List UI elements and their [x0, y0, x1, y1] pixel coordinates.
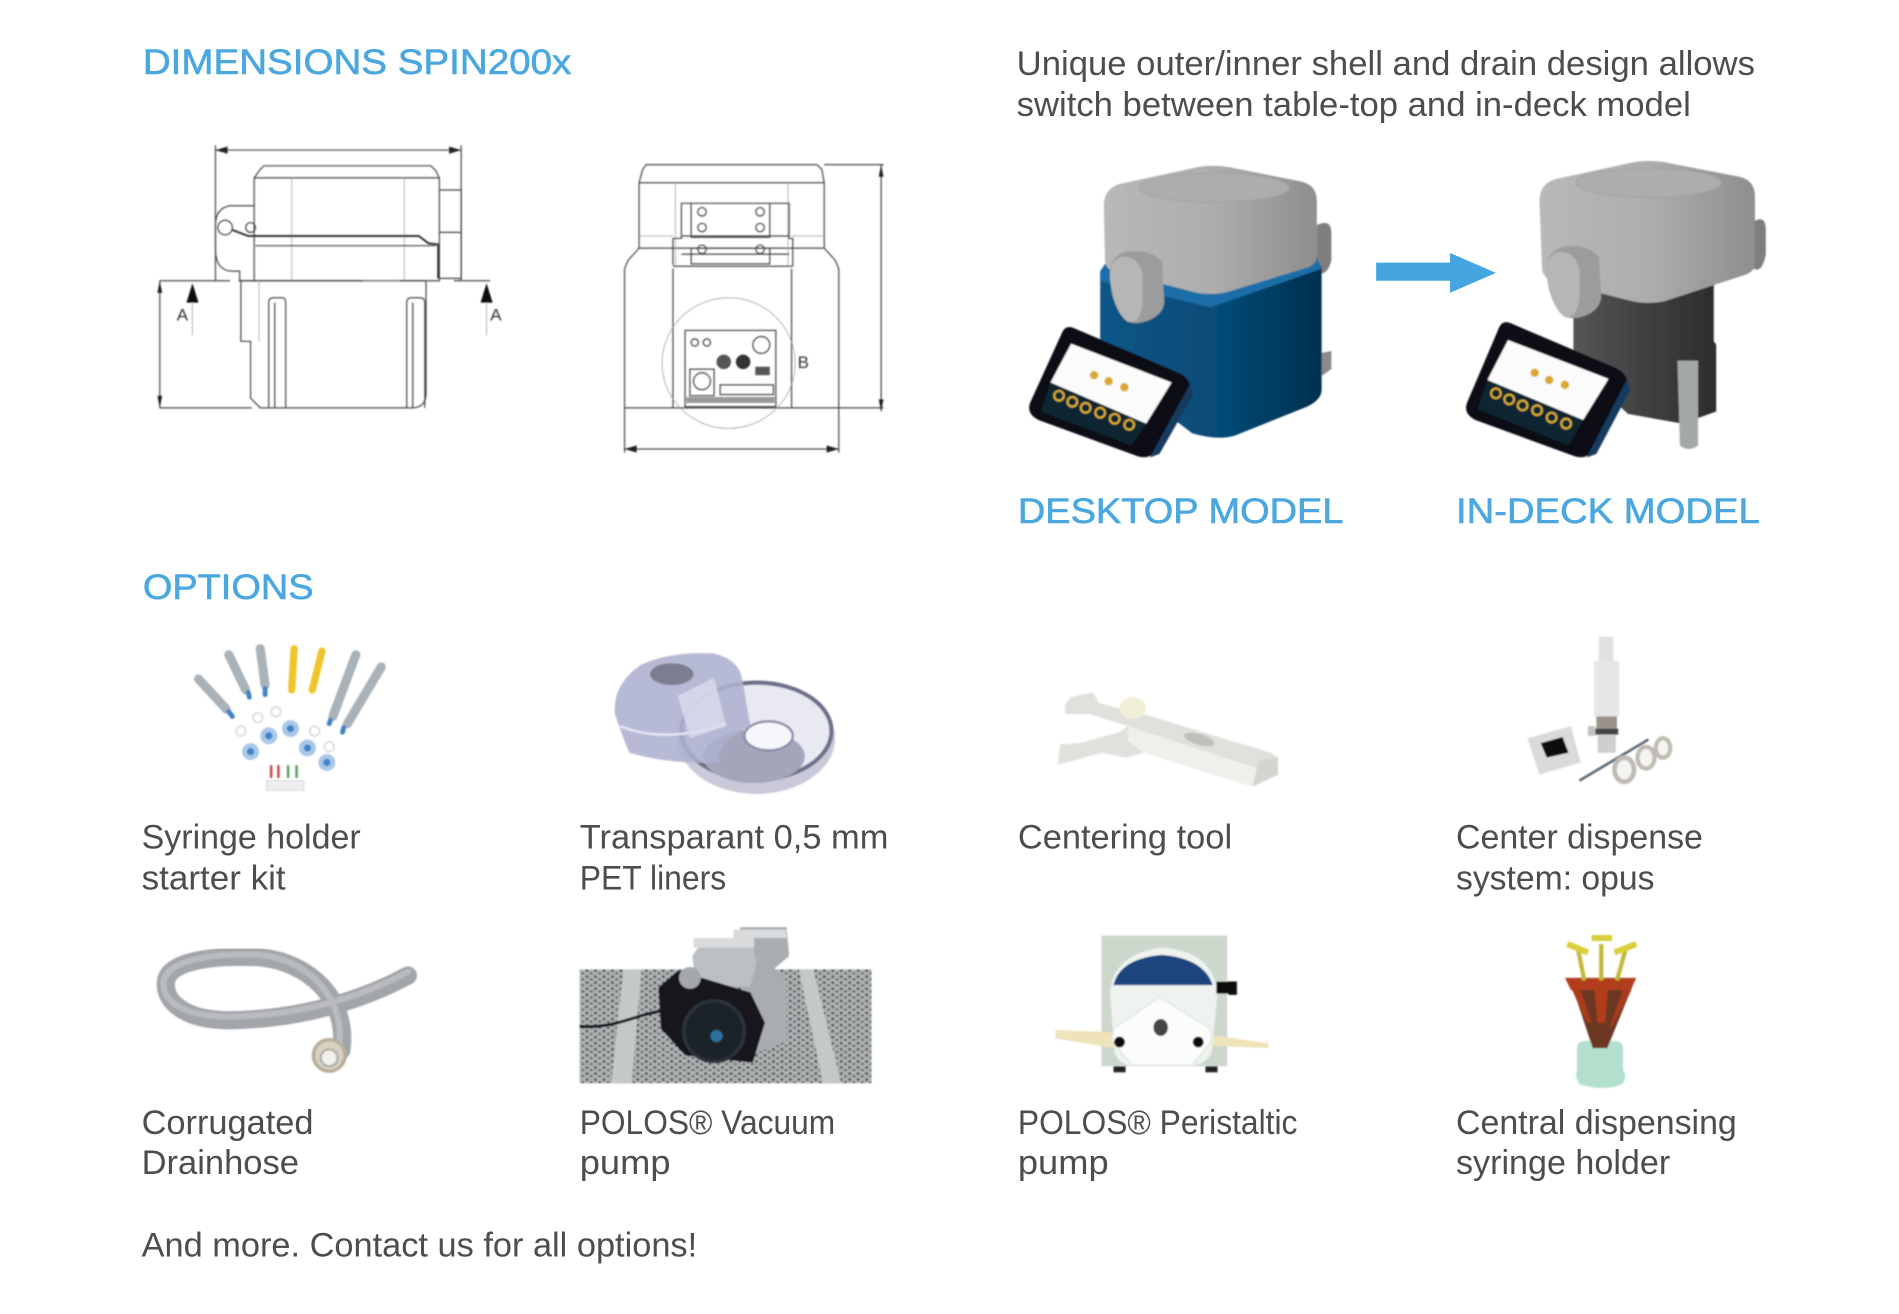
- touchscreen tablet: [1466, 322, 1630, 457]
- option image: peristaltic pump: [1055, 936, 1268, 1072]
- option text: syringe holder: Syringe holder: [142, 818, 361, 856]
- desktop model device: [1029, 166, 1331, 457]
- option image: central dispensing syringe holder: [1565, 938, 1636, 1088]
- option text: center dispense: [1456, 818, 1703, 898]
- intro text: switch between table-top and in-deck model: [1017, 86, 1691, 124]
- option text: drainhose: Drainhose: [142, 1144, 299, 1182]
- option text: PET liners: Transparant 0,5 mm: [580, 818, 888, 856]
- option text: drainhose: Corrugated: [142, 1104, 313, 1142]
- option image: center dispense system: [1527, 637, 1670, 782]
- intro text: [1017, 45, 1755, 124]
- heading: options: OPTIONS: [143, 568, 313, 607]
- option image: syringe kit: [199, 649, 381, 790]
- option text: central dispensing: [1456, 1104, 1737, 1182]
- option text: central dispensing: syringe holder: [1456, 1144, 1670, 1182]
- option text: syringe holder: starter kit: [142, 860, 286, 898]
- front view drawing: [625, 165, 884, 453]
- option text: center dispense: Center dispense: [1456, 818, 1703, 856]
- touchscreen tablet: [1029, 327, 1193, 457]
- option image: centering tool: [1058, 692, 1278, 787]
- option image: PET liners: [615, 653, 835, 794]
- closing note: And more. Contact us for all options!: [142, 1226, 697, 1264]
- option text: peristaltic pump: [1018, 1104, 1298, 1182]
- option text: vacuum pump: pump: [580, 1144, 671, 1182]
- option text: peristaltic pump: pump: [1018, 1144, 1109, 1182]
- side view drawing: A: [177, 306, 189, 325]
- heading: dimensions: DIMENSIONS SPIN200x: [143, 43, 572, 82]
- right knob: [1317, 223, 1331, 274]
- option image: vacuum pump: [580, 927, 871, 1083]
- option text: center dispense: system: opus: [1456, 860, 1654, 898]
- option image: corrugated drainhose: [163, 955, 408, 1071]
- option text: vacuum pump: [580, 1104, 835, 1182]
- option text: vacuum pump: POLOS® Vacuum: [580, 1104, 835, 1142]
- front view drawing: B: [798, 353, 809, 372]
- option text: centering tool: Centering tool: [1018, 818, 1232, 856]
- label: in-deck model: IN-DECK MODEL: [1456, 492, 1760, 531]
- label: desktop model: DESKTOP MODEL: [1018, 492, 1343, 531]
- arrow: [1376, 253, 1496, 293]
- in-deck model device: [1466, 161, 1766, 457]
- option text: PET liners: [580, 818, 888, 898]
- option text: peristaltic pump: POLOS® Peristaltic: [1018, 1104, 1298, 1142]
- side view drawing: A: [490, 306, 502, 325]
- side view drawing: [157, 145, 502, 408]
- option text: drainhose: [142, 1104, 313, 1182]
- option text: central dispensing: Central dispensing: [1456, 1104, 1737, 1142]
- option text: syringe holder: [142, 818, 361, 898]
- intro text: Unique outer/inner shell and drain design allows: [1017, 45, 1755, 83]
- option text: PET liners: PET liners: [580, 860, 726, 898]
